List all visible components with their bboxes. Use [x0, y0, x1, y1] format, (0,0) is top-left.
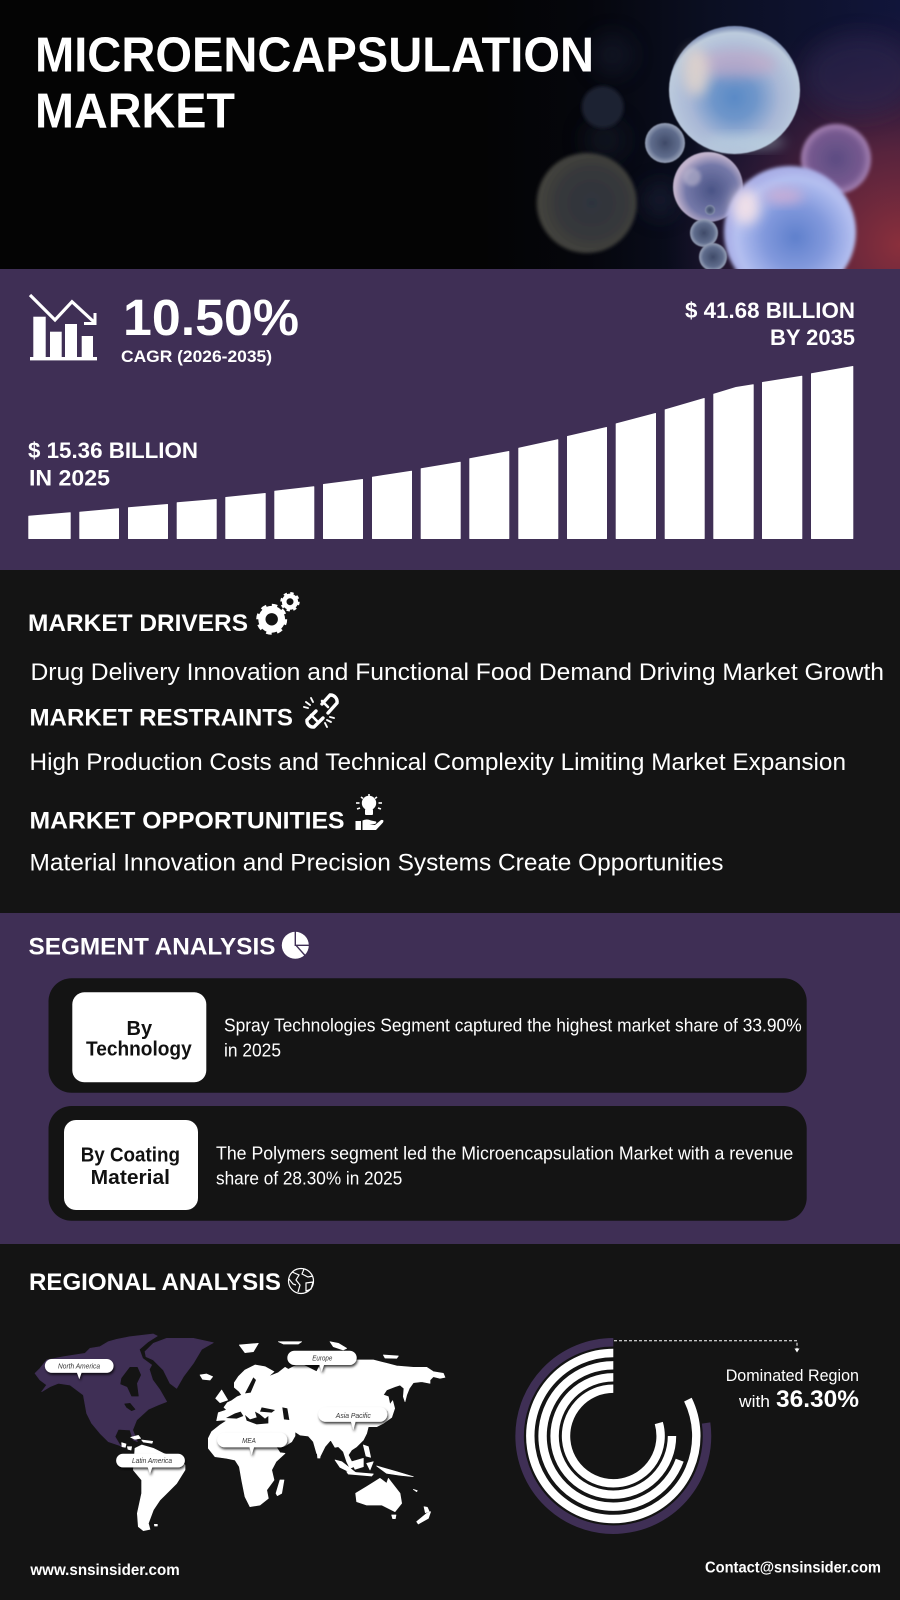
label: North America: North America	[58, 1362, 100, 1370]
heading: market drivers: MARKET DRIVERS	[28, 610, 248, 637]
map: north america	[35, 1334, 213, 1447]
label: Europe	[287, 1351, 357, 1372]
label box: By	[127, 1018, 153, 1040]
world map	[35, 1334, 445, 1531]
label box	[72, 992, 206, 1082]
description	[216, 1143, 793, 1188]
bar chart	[29, 366, 853, 538]
heading: market opportunities: MARKET OPPORTUNITIES	[30, 807, 344, 834]
callout: dominated region: with	[738, 1393, 770, 1411]
label: Asia Pacific	[318, 1407, 387, 1430]
text: opportunities: Material Innovation and Precision Systems Create Opportunities	[30, 850, 724, 877]
label: Latin America	[116, 1454, 185, 1474]
2025 value: $ 15.36 BILLION	[28, 438, 198, 463]
panel: market dynamics	[0, 570, 900, 913]
icon: hand with light bulb	[356, 794, 383, 830]
icon: globe	[288, 1268, 314, 1294]
icon: gears	[258, 593, 298, 633]
title	[35, 28, 594, 138]
label: North America	[45, 1359, 114, 1379]
footer: website: www.snsinsider.com	[29, 1562, 180, 1579]
header banner	[0, 0, 900, 298]
radial bar chart	[520, 1342, 707, 1530]
2035 value	[685, 298, 855, 350]
2035 value: $ 41.68 BILLION	[685, 298, 855, 323]
map: south america and atlantic islands	[122, 1374, 213, 1531]
text: drivers: Drug Delivery Innovation and Functional Food Demand Driving Market Growth	[30, 659, 884, 686]
title: MARKET	[35, 84, 235, 138]
label: MEA	[217, 1433, 287, 1455]
heading: regional analysis: REGIONAL ANALYSIS	[29, 1269, 281, 1296]
icon: pie chart	[282, 931, 310, 959]
bubbles image	[534, 0, 900, 269]
description: in 2025	[224, 1041, 281, 1061]
text: restraints: High Production Costs and Technical Complexity Limiting Market Expansion	[30, 749, 846, 776]
CAGR label: CAGR (2026-2035)	[121, 348, 272, 366]
callout: dominated region	[726, 1367, 859, 1413]
label: MEA: MEA	[242, 1436, 256, 1445]
icon: chart with declining arrow	[30, 295, 97, 360]
footer: contact: Contact@snsinsider.com	[705, 1560, 881, 1577]
panel: regional analysis	[0, 1244, 900, 1600]
label box: Material	[91, 1167, 170, 1189]
dashed leader arrow	[614, 1341, 800, 1352]
heading: market restraints: MARKET RESTRAINTS	[30, 704, 293, 731]
label box: By Coating	[81, 1145, 180, 1167]
icon: broken chain	[304, 695, 337, 727]
card: by coating material	[48, 1106, 807, 1221]
heading: segment analysis: SEGMENT ANALYSIS	[28, 933, 276, 960]
label box: Technology	[86, 1039, 193, 1061]
panel: market size	[0, 269, 900, 570]
label: Asia Pacific: Asia Pacific	[335, 1411, 371, 1420]
callout: dominated region: Dominated Region	[726, 1367, 859, 1385]
map: africa, eurasia and oceania	[208, 1342, 445, 1524]
label: Latin America: Latin America	[132, 1456, 172, 1465]
description: Spray Technologies Segment captured the highest market share of 33.90%	[224, 1016, 802, 1036]
title: MICROENCAPSULATION	[35, 28, 594, 82]
CAGR value: 10.50%	[123, 289, 299, 346]
2025 value	[28, 438, 198, 491]
description: share of 28.30% in 2025	[216, 1168, 402, 1188]
2035 value: BY 2035	[770, 325, 855, 350]
panel: segment analysis	[0, 913, 900, 1244]
description	[224, 1016, 802, 1061]
description: The Polymers segment led the Microencapsulation Market with a revenue	[216, 1143, 793, 1163]
card: by technology	[48, 978, 807, 1093]
label box	[64, 1120, 198, 1210]
2025 value: IN 2025	[29, 466, 110, 491]
label: Europe: Europe	[312, 1354, 332, 1362]
callout: dominated region: 36.30%	[776, 1386, 859, 1413]
